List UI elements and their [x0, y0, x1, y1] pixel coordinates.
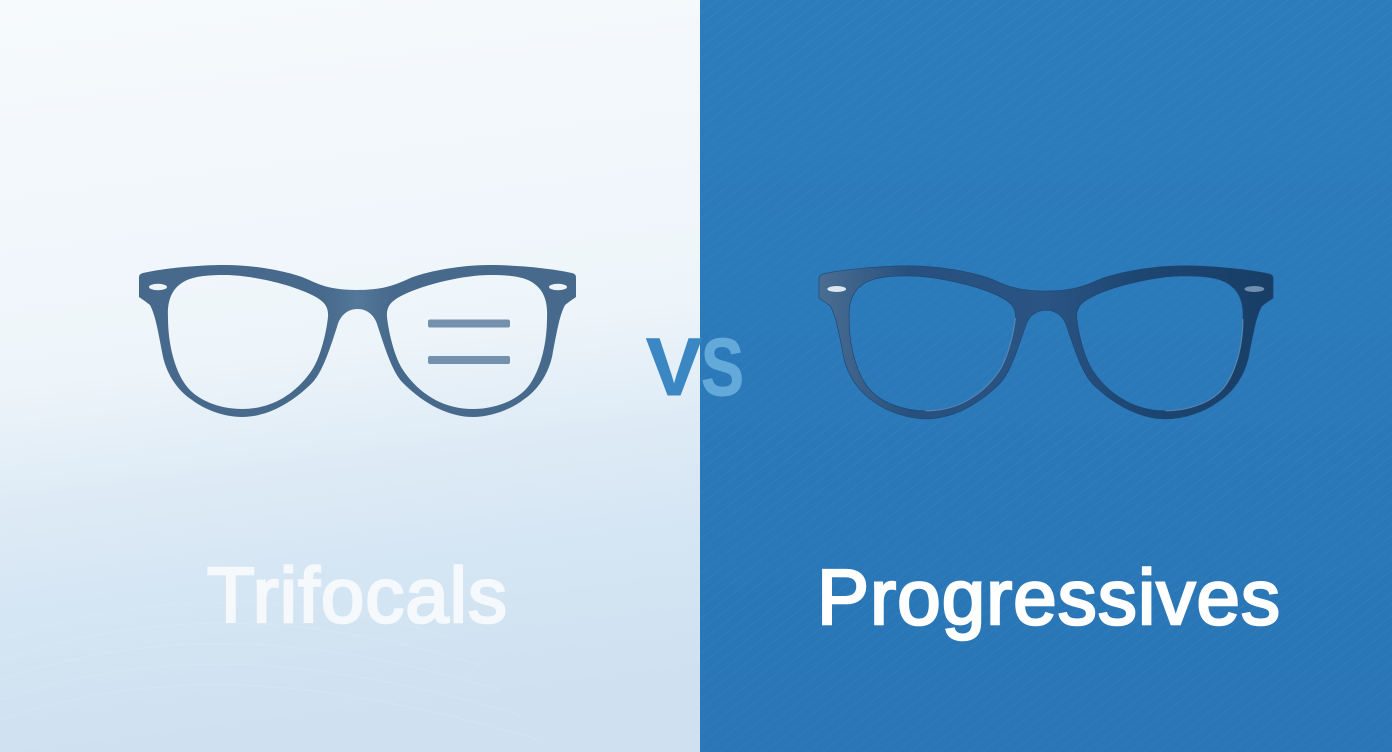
- left rivet: [149, 284, 167, 290]
- lens rim highlight: left: [926, 318, 1015, 411]
- panel: trifocals background: [0, 0, 700, 752]
- lower lens segment line: [428, 356, 510, 364]
- upper lens segment line: [428, 320, 510, 328]
- icon: trifocal glasses: [139, 265, 576, 417]
- letter S: S: [701, 322, 744, 413]
- left rivet: [827, 286, 846, 292]
- heading: progressives: Progressives: [817, 553, 1280, 641]
- panel: progressives background: [700, 0, 1392, 752]
- icon: progressive glasses: [819, 266, 1273, 419]
- right rivet: [549, 284, 567, 290]
- heading: trifocals: Trifocals: [207, 551, 507, 639]
- glasses frame: [139, 265, 576, 417]
- lens rim highlight: right: [1166, 319, 1243, 411]
- vs label: [646, 322, 744, 413]
- right rivet: [1244, 286, 1264, 292]
- glasses frame: [819, 266, 1273, 419]
- letter V: V: [646, 322, 702, 413]
